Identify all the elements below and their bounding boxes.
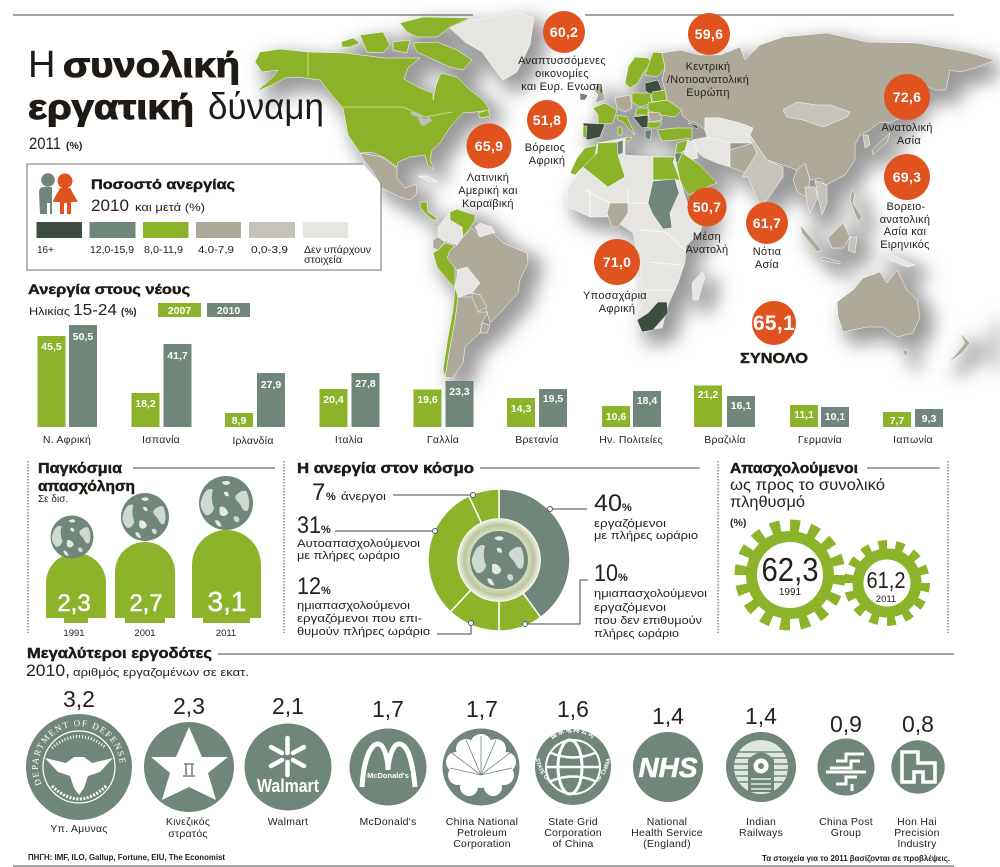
dome 1991: 1991 — [63, 628, 85, 639]
logo: NHS: NHS — [638, 752, 698, 783]
logo: State Grid: State Grid — [548, 816, 598, 828]
legend swatches: 0,0-3,9 — [251, 244, 288, 256]
callout 10%: που δεν επιθυμούν — [594, 615, 703, 627]
title year: (%) — [66, 140, 82, 152]
region labels: Ασία και — [884, 226, 927, 238]
rate circles — [466, 11, 930, 345]
gear 2011 — [849, 545, 925, 621]
legend swatches: Δεν υπάρχουν — [304, 244, 371, 256]
title: εργατική — [28, 88, 194, 127]
title: Η — [28, 44, 55, 86]
logo: McDonald's: McDonald's — [359, 816, 417, 828]
South America — [438, 212, 463, 245]
callout 12%: ημιαπασχολούμενοι — [297, 600, 411, 612]
callout 31%: με πλήρες ωράριο — [297, 550, 400, 562]
logo: Chinese army — [144, 693, 234, 840]
title: δύναμη — [208, 86, 324, 127]
Arabian and Levant — [675, 153, 717, 195]
callout 31%: Αυτοαπασχολούμενοι — [297, 538, 421, 550]
Greenland — [450, 13, 534, 80]
legend swatches: στοιχεία — [304, 254, 342, 266]
Central America — [420, 202, 438, 220]
bar chart: Ισπανία — [142, 434, 180, 446]
callout 10% — [522, 560, 708, 640]
logo: Hon Hai: Precision — [894, 827, 940, 839]
dome 2001 — [115, 542, 175, 639]
bar chart: 14,3 — [511, 403, 531, 415]
panel: employed share of population — [718, 461, 948, 633]
callout 10%: 10 — [594, 560, 618, 587]
logo: China Post: Group — [831, 827, 861, 839]
region labels: και Ευρ. Ενωση — [521, 81, 603, 93]
bar chart: Βραζιλία — [704, 434, 746, 446]
heading: πληθυσμό — [730, 494, 805, 511]
bar chart: Γερμανία — [798, 434, 842, 446]
logo: China Post: China Post — [819, 816, 873, 828]
bar chart: 16,1 — [731, 400, 751, 412]
panel: global employment — [28, 461, 284, 639]
callout 12%: % — [321, 585, 331, 597]
bar chart: 7,7 — [890, 415, 904, 427]
callout 12%: θυμούν πλήρες ωράριο — [297, 626, 430, 638]
logo: McDonald's: McDonald's — [367, 771, 409, 780]
logo: State Grid — [535, 696, 611, 850]
title: συνολική — [63, 46, 240, 85]
title year: 2011 — [29, 134, 61, 153]
Mongolia — [783, 102, 850, 127]
logo: NHS: Health Service — [631, 827, 703, 839]
heading: Η ανεργία στον κόσμο — [297, 461, 474, 477]
Iraq — [682, 140, 698, 160]
bar chart: 50,5 — [73, 331, 93, 343]
land masses — [255, 13, 995, 378]
rate circles: 61,7 — [753, 215, 781, 231]
callout 7%: 7 — [312, 479, 325, 506]
logo: Hon Hai: 0,8 — [902, 711, 934, 737]
heading: (%) — [730, 517, 746, 529]
dome 2011 — [192, 530, 261, 639]
bar chart: Ην. Πολιτείες — [599, 434, 663, 446]
region labels: Αναπτυσσόμενες — [518, 55, 606, 67]
logo: Indian Railways: Railways — [739, 827, 783, 839]
icon: globe 2011 — [199, 476, 253, 530]
legend swatches: 8,0-11,9 — [144, 244, 183, 256]
heading: Σε δισ. — [38, 494, 68, 505]
youth unemployment subheading: (%) — [121, 307, 137, 318]
logo: State Grid: 1,6 — [557, 696, 589, 722]
callout 31% — [297, 512, 438, 562]
logo: China National Petroleum: China National — [446, 816, 518, 828]
youth unemployment subheading — [29, 302, 137, 319]
logo: China Post — [818, 711, 874, 839]
bar chart: 8,9 — [232, 415, 246, 427]
callout 12%: εργαζόμενοι που επι- — [297, 613, 422, 625]
top rule — [13, 14, 954, 16]
bar chart: 18,2 — [135, 398, 156, 410]
callout 10%: εργαζόμενοι — [594, 602, 667, 614]
Africa — [567, 138, 708, 330]
bar chart: Ν. Αφρική — [43, 434, 91, 446]
region labels: /Νοτιοανατολική — [667, 74, 749, 86]
logo: Indian Railways — [726, 703, 796, 839]
callout 7%: άνεργοι — [341, 491, 387, 503]
New Zealand — [948, 333, 970, 363]
logo: Walmart: Walmart — [268, 816, 308, 828]
icon: people — [39, 173, 78, 214]
logo: Indian Railways: Indian — [746, 816, 776, 828]
bar chart: 45,5 — [41, 341, 62, 353]
bar chart: 10,6 — [606, 411, 626, 423]
Mexico — [360, 153, 417, 200]
region labels: Αφρική — [529, 155, 565, 167]
Canada US borders — [308, 52, 452, 117]
logo: Department of Defense: Υπ. Αμυνας — [50, 823, 108, 835]
logo: Walmart — [244, 693, 332, 828]
panel: largest employers — [26, 645, 954, 850]
logo: China Post: 0,9 — [830, 711, 862, 737]
region labels: Ανατολή — [686, 244, 728, 256]
subheading: αριθμός εργαζομένων σε εκατ. — [73, 667, 249, 679]
bar chart: Ιαπωνία — [893, 434, 933, 446]
logo: NHS: National — [647, 816, 687, 828]
legend swatches: 12,0-15,9 — [90, 244, 134, 256]
logo: State Grid: of China — [552, 838, 594, 850]
source note: ΠΗΓΗ: IMF, ILO, Gallup, Fortune, EIU, The Economist — [28, 853, 225, 862]
logo: Chinese army: στρατός — [168, 828, 208, 840]
legend subheading: και μετά (%) — [135, 202, 205, 214]
youth unemployment heading: Ανεργία στους νέους — [28, 281, 190, 297]
region labels: Ευρώπη — [686, 87, 730, 99]
callout 40%: % — [622, 502, 632, 514]
heading: Απασχολούμενοι — [730, 461, 858, 477]
bar chart: 27,9 — [261, 379, 281, 391]
logo: NHS — [631, 703, 703, 850]
logo: China National Petroleum: Corporation — [453, 838, 511, 850]
bar chart: Βρετανία — [515, 434, 559, 446]
India — [742, 133, 783, 205]
dome 2001: 2,7 — [129, 590, 163, 617]
region labels: Βορειο- — [887, 201, 926, 213]
logo: Department of Defense — [26, 686, 132, 835]
logo: State Grid: 国家电网公司 — [550, 729, 594, 740]
bar chart: 19,6 — [417, 394, 438, 406]
logo: NHS: 1,4 — [652, 703, 684, 729]
legend swatches: 4,0-7,9 — [198, 244, 234, 256]
logo: McDonald's — [350, 696, 426, 828]
subheading — [26, 661, 249, 680]
logo: State Grid: Corporation — [544, 827, 602, 839]
callout 40%: με πλήρες ωράριο — [594, 530, 698, 542]
callout 12% — [297, 573, 474, 638]
gear 1991 — [740, 526, 840, 624]
gear 1991: 62,3 — [762, 551, 818, 588]
subheading: 2010, — [26, 661, 70, 680]
Central Asia — [705, 118, 755, 143]
region labels: Αφρική — [599, 303, 635, 315]
chart legend: 2010 — [217, 305, 240, 317]
South East Asia — [793, 163, 810, 197]
Korea — [863, 135, 870, 148]
rate circles: 72,6 — [893, 89, 921, 105]
region labels: Μέση — [693, 231, 721, 243]
rate circles: 60,2 — [550, 24, 578, 40]
region labels: Αμερική και — [458, 185, 518, 197]
rate circles: 50,7 — [693, 199, 721, 215]
Australia — [837, 270, 920, 337]
world map — [255, 11, 995, 378]
Great Lakes — [411, 112, 432, 126]
heading — [730, 461, 885, 529]
donut chart — [428, 489, 570, 631]
callout 31%: 31 — [297, 512, 321, 539]
Pakistan — [730, 143, 757, 173]
region labels: Βόρειος — [525, 142, 565, 154]
rate circles: 71,0 — [603, 254, 631, 270]
legend subheading: 2010 — [91, 197, 129, 215]
bar chart: Ιταλία — [335, 434, 363, 446]
total label: ΣΥΝΟΛΟ — [740, 350, 808, 367]
icon: globe 1991 — [50, 516, 94, 558]
logo: Hon Hai: Industry — [897, 838, 937, 850]
rate circles: 65,1 — [753, 312, 795, 335]
bar chart: 23,3 — [449, 386, 470, 398]
African borders — [585, 188, 685, 290]
bar chart: Ιρλανδία — [232, 435, 274, 447]
logo: Walmart: 2,1 — [272, 693, 304, 719]
callout 10%: πλήρες ωράριο — [594, 628, 679, 640]
forecast note: Τα στοιχεία για το 2011 βασίζονται σε προβλέψεις. — [762, 854, 950, 863]
region labels: Ανατολική — [881, 122, 933, 134]
chart legend — [158, 303, 250, 317]
region labels: οικονομίες — [535, 68, 589, 80]
bar chart: 20,4 — [323, 394, 344, 406]
region labels: Ασία — [755, 259, 779, 271]
logo: China National Petroleum: 1,7 — [466, 696, 498, 722]
Europe — [625, 57, 652, 88]
region labels: Υποσαχάρια — [583, 290, 647, 302]
region labels — [458, 55, 933, 315]
callout 7% — [312, 479, 476, 506]
rate circles: 59,6 — [695, 26, 723, 42]
North America — [255, 17, 490, 170]
callout 31%: % — [321, 524, 331, 536]
callout 40%: εργαζόμενοι — [594, 518, 667, 530]
rate circles: 51,8 — [533, 112, 561, 128]
rate circles: 65,9 — [475, 138, 503, 154]
legend swatches — [36, 222, 371, 266]
legend panel — [27, 164, 381, 270]
bar chart: 41,7 — [167, 350, 188, 362]
logo: Hon Hai: Hon Hai — [897, 816, 937, 828]
Japan — [872, 133, 890, 155]
dome 1991 — [46, 553, 106, 639]
region labels: ανατολική — [880, 214, 930, 226]
dome 1991: 2,3 — [57, 590, 91, 617]
callout 40%: 40 — [594, 490, 622, 517]
heading: ως προς το συνολικό — [730, 477, 885, 494]
bar chart: 21,2 — [698, 389, 718, 401]
rate circles: 69,3 — [893, 169, 921, 185]
logo: China National Petroleum: Petroleum — [457, 827, 507, 839]
callout 7%: % — [326, 491, 336, 503]
heading: Παγκόσμια — [38, 461, 122, 477]
region labels: Ασία — [897, 135, 921, 147]
bar chart: 18,4 — [637, 395, 657, 407]
title — [28, 44, 324, 127]
bottom rule — [13, 865, 954, 867]
heading — [38, 461, 135, 505]
chart legend: 2007 — [168, 305, 191, 317]
logo: China National Petroleum — [442, 696, 520, 850]
icon: globe 2001 — [121, 493, 169, 541]
gear 1991: 1991 — [779, 587, 802, 598]
bar chart: 9,3 — [922, 413, 936, 425]
Russia China Kazakhstan — [662, 33, 995, 185]
region labels: Καραϊβική — [462, 198, 514, 210]
bar chart: 19,5 — [543, 393, 563, 405]
region labels: Λατινική — [467, 172, 509, 184]
title year — [29, 134, 82, 153]
dome 2011: 3,1 — [208, 586, 246, 617]
bar chart: 11,1 — [794, 409, 814, 421]
logo: Department of Defense: DEPARTMENT OF DEFENSE — [32, 720, 126, 786]
bar chart — [38, 325, 943, 447]
icon: centre globe — [470, 531, 528, 589]
logo: Walmart: Walmart — [257, 776, 319, 796]
youth unemployment subheading: 15-24 — [73, 302, 117, 319]
bar chart: 27,8 — [355, 378, 376, 390]
Cuba — [418, 176, 438, 182]
logo: NHS: (England) — [643, 838, 691, 850]
region labels: Ειρηνικός — [880, 239, 930, 251]
legend heading: Ποσοστό ανεργίας — [91, 176, 235, 192]
dome 2011: 2011 — [216, 628, 236, 639]
gear 2011: 61,2 — [866, 567, 906, 593]
logo: Hon Hai — [891, 711, 945, 850]
logo: Indian Railways: 1,4 — [745, 703, 777, 729]
callout 10%: % — [618, 572, 628, 584]
callout 40% — [548, 490, 698, 542]
logo: Department of Defense: 3,2 — [63, 686, 95, 712]
callout 12%: 12 — [297, 573, 321, 600]
logo: Chinese army: Κινεζικός — [166, 816, 210, 828]
region labels: Κεντρική — [686, 61, 730, 73]
youth unemployment subheading: Ηλικίας — [29, 306, 70, 318]
callout 10%: ημιαπασχολούμενοι — [594, 588, 708, 600]
logo: State Grid: STATE GRID CORPORATION OF CHINA — [536, 758, 610, 785]
bar chart: 10,1 — [825, 411, 845, 423]
logo: Chinese army: 2,3 — [173, 693, 205, 719]
Iran — [692, 137, 730, 167]
gear 2011: 2011 — [876, 594, 896, 605]
legend swatches: 16+ — [37, 245, 54, 256]
heading: απασχόληση — [38, 479, 135, 495]
panel: unemployment in the world — [297, 461, 708, 640]
heading: Μεγαλύτεροι εργοδότες — [27, 645, 212, 662]
dome 2001: 2001 — [134, 628, 156, 639]
region labels: Νότια — [753, 246, 782, 258]
bar chart: Γαλλία — [427, 434, 459, 446]
legend subheading — [91, 197, 205, 215]
logo: McDonald's: 1,7 — [372, 696, 404, 722]
